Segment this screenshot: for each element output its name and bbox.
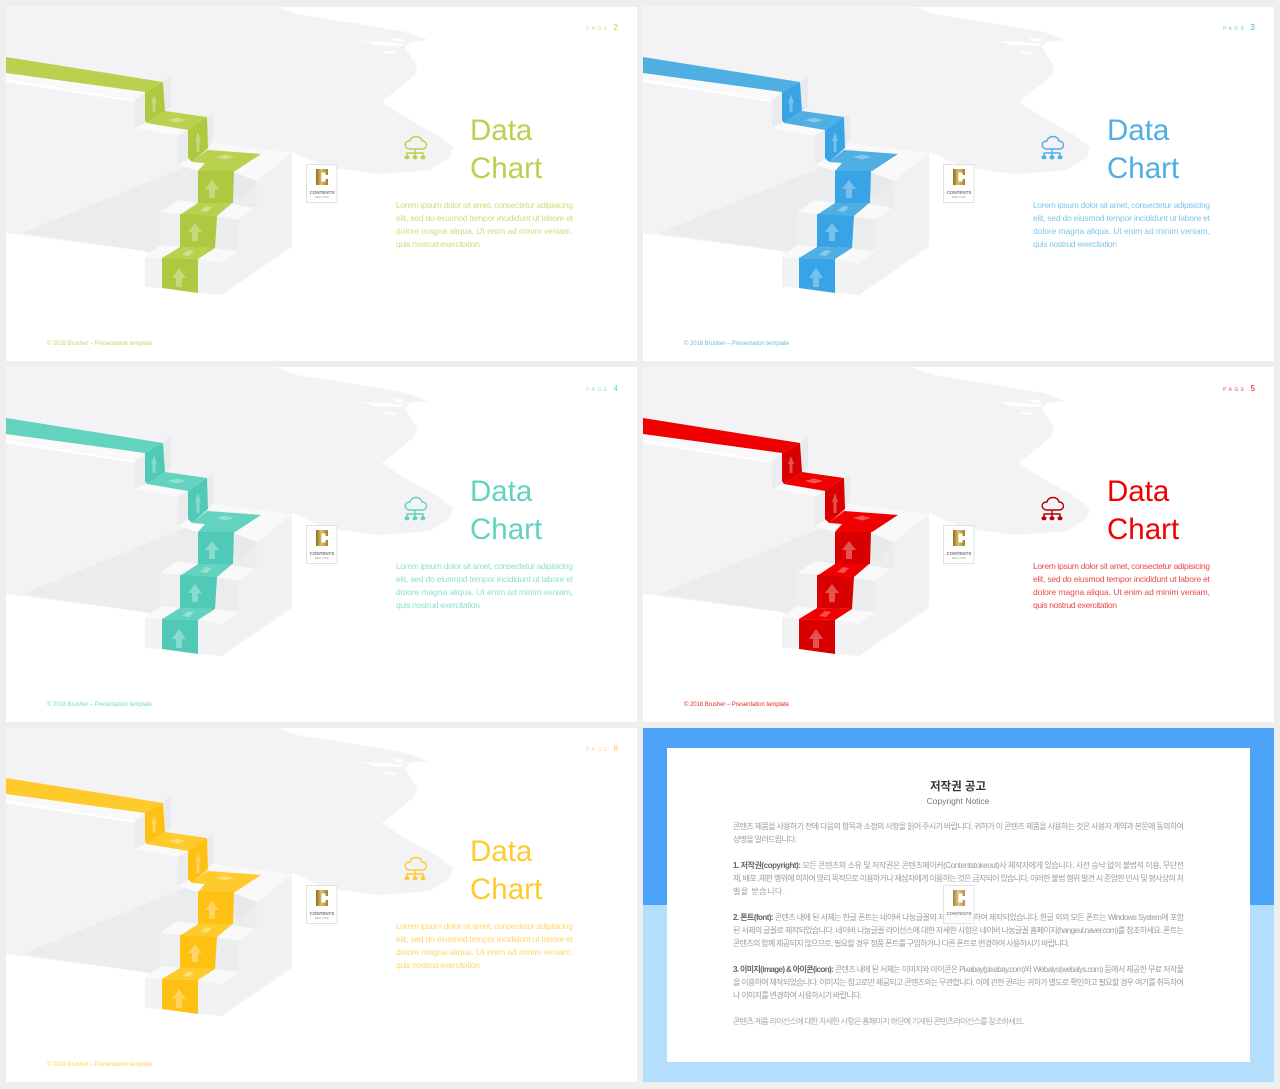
section 1 copyright (733, 860, 1184, 896)
logo badge (306, 526, 337, 564)
section 3 image and icon: 나 이미지를 변경하여 사용하시기 바랍니다. (733, 990, 862, 1000)
heading: Data (470, 835, 533, 868)
body text: dolore magna aliqua. Ut enim ad minim veniam, (396, 947, 573, 957)
section 3 image and icon (733, 964, 1184, 1000)
panel: copyright notice (643, 728, 1274, 1082)
panel: green page 2 (6, 6, 637, 361)
body text: quis nostrud exercitation (1033, 239, 1117, 249)
icon: cloud network (404, 498, 426, 520)
footer: © 2018 Brusher – Presentation template (47, 340, 153, 347)
body text: dolore magna aliqua. Ut enim ad minim veniam, (396, 226, 573, 236)
logo badge: REAL LOOK (315, 917, 329, 920)
icon: cloud network (1042, 498, 1064, 520)
body text: elit, sed do eiusmod tempor incididunt ut labore et (396, 574, 574, 584)
section 2 font (733, 912, 1185, 948)
panel: yellow page 6 (6, 727, 637, 1082)
page number: PAGE 4 (586, 384, 619, 393)
notice subtitle: Copyright Notice (927, 796, 990, 806)
staircase with yellow ribbon (6, 778, 292, 1016)
body text: Lorem ipsum dolor sit amet, consectetur adipisicing (396, 561, 573, 571)
section 3 image and icon: 3. 이미지(image) & 아이콘(icon): 콘텐츠 내에 된 서체는 이미지와 아이콘은 Pixabay(pixabay.com)와 Webalys(webalys.com) 등에서 제공한 무료 저작물 (733, 964, 1184, 974)
intro paragraph (733, 821, 1184, 844)
footer: © 2018 Brusher – Presentation template (684, 340, 790, 347)
body text: quis nostrud exercitation (1033, 600, 1117, 610)
staircase with teal ribbon (6, 418, 292, 656)
section 1 copyright: 벌을 받습니다. (733, 886, 785, 896)
body text: quis nostrud exercitation (396, 239, 480, 249)
page number: PAGE 3 (1223, 23, 1256, 32)
logo badge: REAL LOOK (315, 557, 329, 560)
intro paragraph: 성명을 알려드립니다. (733, 834, 797, 844)
body text (396, 200, 574, 249)
body text: dolore magna aliqua. Ut enim ad minim veniam, (1033, 226, 1210, 236)
logo badge (306, 164, 337, 202)
section 3 image and icon: 을 이용하여 제작되었습니다. 이미지는 참고로만 제공되고 콘텐츠와는 무관합니다. 이에 관한 권리는 귀하가 별도로 확인하고 필요할 경우 여기를 취득하여 (733, 977, 1184, 987)
logo badge: CONTENTS (947, 551, 971, 556)
body text: Lorem ipsum dolor sit amet, consectetur adipisicing (1033, 561, 1210, 571)
logo badge overlapping notice: CONTENTS (947, 911, 971, 916)
section 1 copyright: 재, 배포 ,재판 행위에 의하여 영리 목적으로 이용하거나 제삼자에게 이용하는 것은 금지되어 있습니다. 이러한 불법 행위 발견 시 준엄한 민사 및 형사상의 처 (733, 873, 1184, 883)
section 2 font: 2. 폰트(font): 콘텐츠 내에 된 서체는 한글 폰트는 네이버 나눔글꼴의 저작권 사용하여 제작되었습니다. 한글 외의 모든 폰트는 Windows System에 포함 (733, 912, 1185, 922)
heading: Data (1107, 114, 1170, 147)
logo badge (944, 526, 974, 564)
heading: Chart (1107, 152, 1179, 185)
heading: Chart (470, 152, 542, 185)
panel: teal page 4 (6, 367, 637, 722)
logo badge (944, 164, 974, 202)
intro paragraph: 콘텐츠 제품을 사용하기 전에 다음의 항목과 소정의 사항을 읽어 주시기 바랍니다. 귀하가 이 콘텐츠 제품을 사용하는 것은 사용자 계약과 본문에 동의하여 (733, 821, 1184, 831)
section 2 font: 콘텐츠의 함께 제공되지 않으므로, 필요할 경우 정품 폰트를 구입하거나 다른 폰트로 변경하여 사용하시기 바랍니다. (733, 938, 1070, 948)
heading: Chart (1107, 513, 1179, 546)
panel: blue page 3 (643, 6, 1274, 361)
heading: Chart (470, 513, 542, 546)
heading: Chart (470, 873, 542, 906)
logo badge: CONTENTS (310, 911, 334, 916)
icon: cloud network (404, 136, 426, 159)
staircase with blue ribbon (643, 57, 929, 295)
body text: Lorem ipsum dolor sit amet, consectetur adipisicing (396, 921, 573, 931)
heading: Data (1107, 475, 1170, 508)
panel: red page 5 (643, 367, 1274, 722)
staircase with green ribbon (6, 57, 292, 295)
body text (396, 921, 574, 970)
body text: quis nostrud exercitation (396, 600, 480, 610)
body text: elit, sed do eiusmod tempor incididunt ut labore et (1033, 574, 1211, 584)
section 1 copyright: 1. 저작권(copyright): 모든 콘텐츠의 소유 및 저작권은 콘텐츠메이커(Contentstokeout)사 제작자에게 있습니다. 사전 승낙 없이 불법적 이용, 무단전 (733, 860, 1184, 870)
footer: © 2018 Brusher – Presentation template (684, 701, 790, 708)
closing line: 콘텐츠 제품 라이선스에 대한 자세한 사항은 홈페이지 하단에 기재된 콘텐츠라이선스를 참조하세요. (733, 1017, 1024, 1026)
logo badge: REAL LOOK (952, 557, 966, 560)
body text: quis nostrud exercitation (396, 960, 480, 970)
body text: elit, sed do eiusmod tempor incididunt ut labore et (396, 213, 574, 223)
section 2 font: 된 서체의 글꼴로 제작되었습니다. 네이버 나눔글꼴 라이선스에 대한 자세한 사항은 네이버 나눔글꼴 홈페이지(hangeul.naver.com)를 참조하세요. 폰트는 (733, 925, 1184, 935)
logo badge overlapping notice (944, 886, 974, 924)
logo badge: CONTENTS (310, 551, 334, 556)
page number: PAGE 5 (1223, 384, 1256, 393)
icon: cloud network (1042, 136, 1064, 159)
body text: Lorem ipsum dolor sit amet, consectetur adipisicing (1033, 200, 1210, 210)
logo badge (306, 886, 337, 924)
icon: cloud network (404, 858, 426, 880)
body text (1033, 561, 1211, 610)
logo badge: CONTENTS (310, 190, 334, 195)
body text: elit, sed do eiusmod tempor incididunt ut labore et (396, 934, 574, 944)
footer: © 2018 Brusher – Presentation template (47, 1061, 153, 1068)
footer: © 2018 Brusher – Presentation template (47, 701, 153, 708)
page number: PAGE 2 (586, 23, 619, 32)
heading: Data (470, 475, 533, 508)
page number: PAGE 6 (586, 744, 619, 753)
heading: Data (470, 114, 533, 147)
logo badge: REAL LOOK (952, 196, 966, 199)
body text: elit, sed do eiusmod tempor incididunt ut labore et (1033, 213, 1211, 223)
staircase with red ribbon (643, 418, 929, 656)
body text: Lorem ipsum dolor sit amet, consectetur adipisicing (396, 200, 573, 210)
logo badge: CONTENTS (947, 190, 971, 195)
body text: dolore magna aliqua. Ut enim ad minim veniam, (1033, 587, 1210, 597)
notice title: 저작권 공고 (930, 779, 986, 793)
body text (396, 561, 574, 610)
logo badge: REAL LOOK (315, 196, 329, 199)
body text: dolore magna aliqua. Ut enim ad minim veniam, (396, 587, 573, 597)
body text (1033, 200, 1211, 249)
